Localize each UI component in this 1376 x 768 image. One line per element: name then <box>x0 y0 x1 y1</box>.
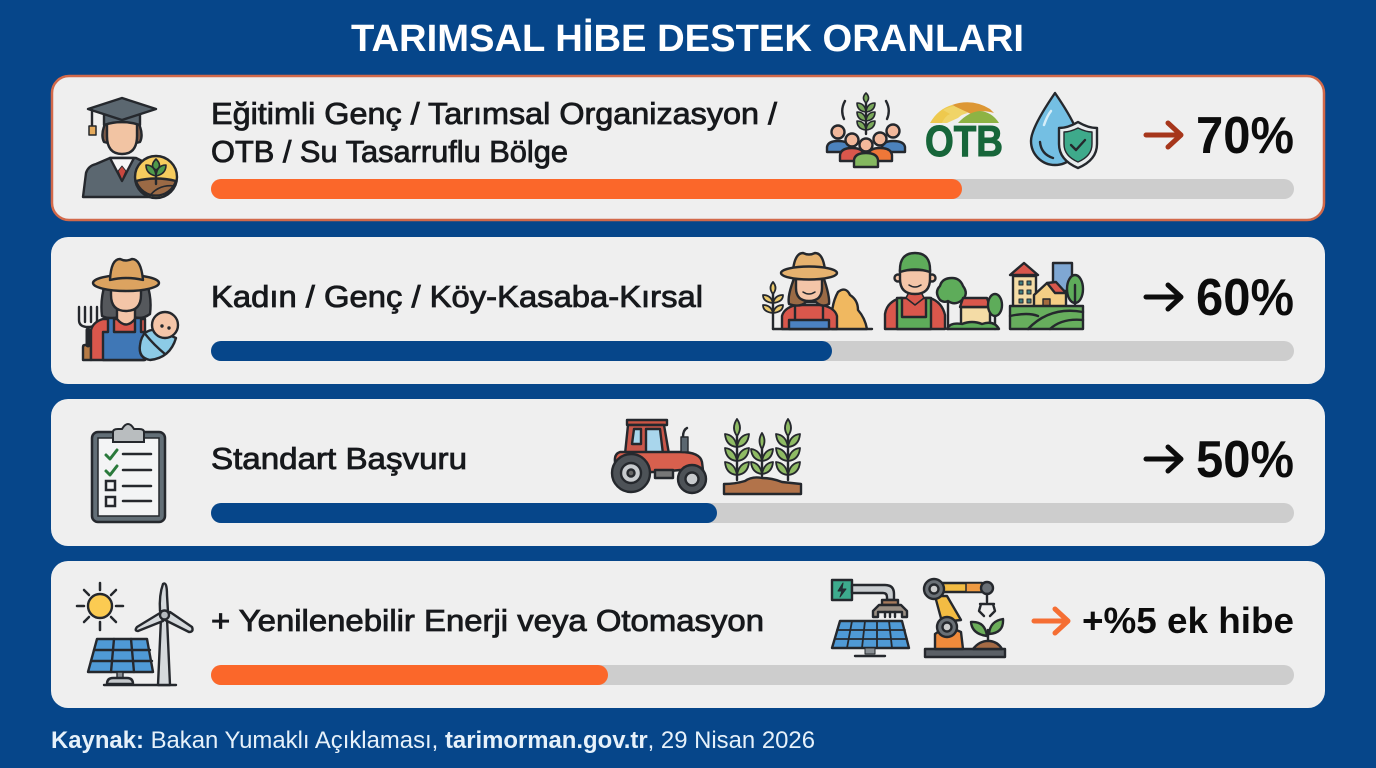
icon: robot arm and plant <box>924 579 1005 657</box>
icon: seedlings in soil <box>724 419 801 494</box>
icon: town and fields <box>1010 263 1083 329</box>
icon: clipboard checklist <box>92 424 165 522</box>
panel: +5% bonus <box>51 561 1325 708</box>
icon: woman farmer with hay <box>763 253 872 329</box>
icon: young farmer with house <box>885 253 1002 329</box>
row text: Kadın / Genç / Köy-Kasaba-Kırsal <box>211 279 703 314</box>
icon: solar panel with gripper <box>832 580 909 656</box>
panel: 50% <box>51 399 1325 546</box>
icon: red tractor <box>612 420 706 493</box>
icon: sun, solar panel and wind turbine <box>77 583 193 685</box>
progress bar <box>211 665 1294 685</box>
percentage: 60% <box>1196 269 1294 327</box>
title: TARIMSAL HİBE DESTEK ORANLARI <box>351 18 1024 60</box>
bonus label: +%5 ek hibe <box>1082 600 1294 641</box>
icon: OTB logo <box>925 102 1003 166</box>
icon: farmers group with wheat <box>827 93 905 167</box>
arrow <box>1146 447 1181 471</box>
icon: graduate <box>83 98 177 198</box>
source footer: Kaynak: Bakan Yumaklı Açıklaması, tarimorman.gov.tr, 29 Nisan 2026 <box>51 727 815 754</box>
icon: OTB logo: OTB <box>925 117 1003 166</box>
arrow <box>1146 285 1181 309</box>
row text: + Yenilenebilir Enerji veya Otomasyon <box>211 603 764 638</box>
panel: 70% <box>52 76 1324 220</box>
percentage: 70% <box>1196 107 1294 165</box>
progress bar <box>211 179 1294 199</box>
row text: Standart Başvuru <box>211 441 467 476</box>
arrow <box>1034 609 1068 633</box>
row text <box>211 96 777 169</box>
icon: water drop with shield <box>1031 93 1097 168</box>
arrow <box>1146 123 1181 147</box>
progress bar <box>211 341 1294 361</box>
row text: Eğitimli Genç / Tarımsal Organizasyon / <box>211 96 777 131</box>
percentage: 50% <box>1196 431 1294 489</box>
icon: woman farmer with baby <box>79 259 178 360</box>
panel: 60% <box>51 237 1325 384</box>
row text: OTB / Su Tasarruflu Bölge <box>211 134 568 169</box>
progress bar <box>211 503 1294 523</box>
